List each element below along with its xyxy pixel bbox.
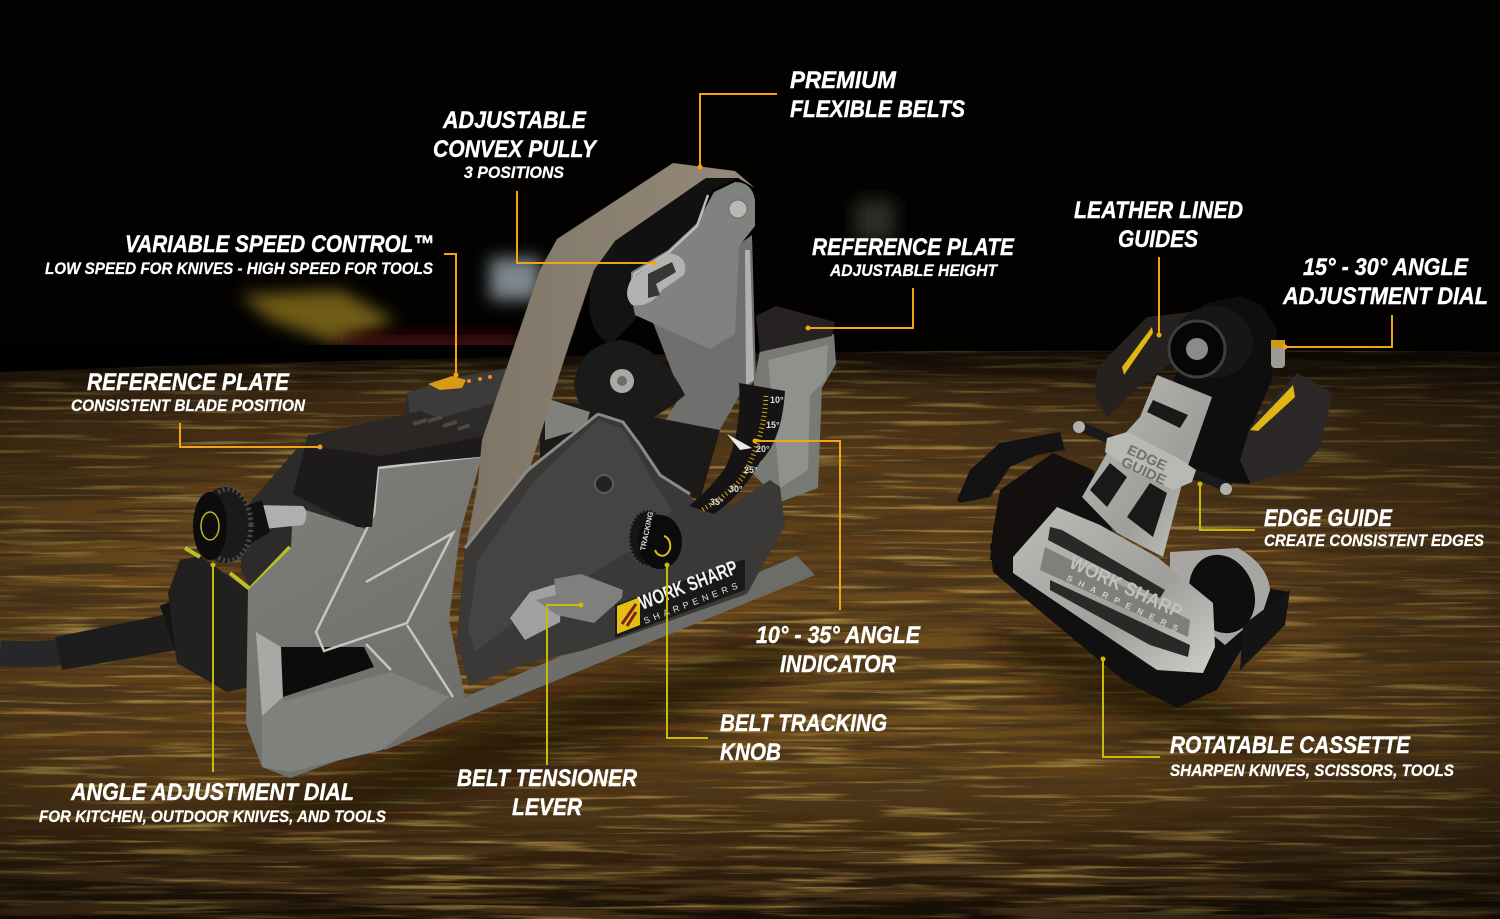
- callout: 10-35 angle indicator: 10° - 35° ANGLE: [756, 622, 921, 649]
- left reference plate: [293, 411, 490, 527]
- angle indicator scale: 15°: [766, 420, 780, 430]
- work sharp nameplate: WORK SHARP: [636, 557, 741, 615]
- top aluminium pulley plate: [631, 182, 755, 349]
- tower windows: [1090, 400, 1188, 537]
- callout: leather lined guides: GUIDES: [1118, 226, 1198, 253]
- right frame end: [1240, 590, 1290, 670]
- dark rotor behind wing: [990, 453, 1090, 560]
- back roller wheel: [589, 235, 668, 345]
- silver cassette body: WORK SHARP: [1066, 552, 1186, 623]
- tensioner slot: [510, 582, 562, 640]
- left guide pod: [1095, 312, 1190, 418]
- plate screw: [729, 200, 747, 218]
- angle indicator scale: 20°: [756, 444, 770, 454]
- callout: rotatable cassette: [1100, 656, 1455, 780]
- lower idler wheel: [574, 340, 685, 428]
- callout: reference plate right: [806, 234, 1015, 330]
- yellow green trim: [185, 547, 290, 589]
- callout: 10-35 angle indicator: INDICATOR: [780, 651, 897, 678]
- power cord: [0, 601, 203, 670]
- edge guide block: GUIDE: [1119, 453, 1169, 488]
- callout: 10-35 angle indicator: [752, 438, 921, 678]
- angle indicator scale: 10°: [770, 395, 784, 405]
- rear motor housing: [241, 366, 522, 588]
- cassette frame: [990, 453, 1290, 708]
- callout: belt tensioner lever: [457, 602, 638, 821]
- callout: variable speed control: LOW SPEED FOR KNIVES - HIGH SPEED FOR TOOLS: [45, 259, 434, 278]
- callout: edge guide: [1198, 482, 1485, 550]
- rear end cap: [168, 556, 250, 692]
- callout: reference plate left: CONSISTENT BLADE POSITION: [71, 396, 306, 415]
- tracking knob: [629, 510, 682, 569]
- dark cast housing: [457, 414, 785, 686]
- callout: angle adjustment dial: [39, 562, 387, 826]
- callout: variable speed control: [45, 231, 458, 378]
- right reference plate: [740, 306, 836, 502]
- callout: edge guide: EDGE GUIDE: [1264, 505, 1393, 532]
- callout: belt tracking knob: KNOB: [720, 739, 781, 766]
- angle adjustment dial: [193, 487, 306, 563]
- aluminium belt body: [246, 456, 815, 778]
- angle indicator scale: 30°: [729, 484, 743, 494]
- housing boss hole: [595, 475, 613, 493]
- aluminium rib highlights: [316, 456, 482, 697]
- callout: reference plate right: ADJUSTABLE HEIGHT: [829, 261, 998, 280]
- edge guide bar: [1073, 421, 1232, 495]
- angle indicator scale: 25°: [744, 465, 758, 475]
- belt sharpener machine: [0, 163, 836, 778]
- callout: adjustable convex pully: 3 POSITIONS: [464, 163, 565, 182]
- callout: 15-30 angle adjustment dial: [1282, 254, 1488, 350]
- callout: belt tensioner lever: LEVER: [512, 794, 583, 821]
- left wing: [957, 432, 1065, 503]
- callout: belt tracking knob: [664, 562, 887, 766]
- callout: premium flexible belts: FLEXIBLE BELTS: [790, 96, 965, 123]
- angle indicator scale: [689, 383, 785, 514]
- callout: variable speed control: VARIABLE SPEED CONTROL™: [125, 231, 434, 258]
- right guide pod: [1240, 373, 1333, 483]
- callout: belt tensioner lever: BELT TENSIONER: [457, 765, 638, 792]
- callout: rotatable cassette: SHARPEN KNIVES, SCISSORS, TOOLS: [1170, 761, 1455, 780]
- upright mast: [652, 235, 756, 433]
- tensioner lever: [536, 574, 623, 623]
- shadows beneath the tools: [245, 606, 1280, 856]
- tracking knob: TRACKING: [638, 511, 655, 551]
- silver tower: [1082, 375, 1212, 557]
- left end opening: [256, 632, 449, 772]
- rear black column: [1170, 296, 1277, 484]
- angle indicator scale: 35°: [710, 497, 724, 507]
- edge guide block: [1105, 432, 1196, 490]
- callout: reference plate left: REFERENCE PLATE: [87, 369, 290, 396]
- edge guide block: EDGE: [1125, 441, 1170, 473]
- callout: premium flexible belts: PREMIUM: [790, 67, 897, 94]
- callout: adjustable convex pully: ADJUSTABLE: [442, 107, 587, 134]
- convex pulley position slot: [627, 253, 685, 305]
- roller drum: [1170, 545, 1270, 645]
- callout: reference plate left: [71, 369, 322, 450]
- callout: leather lined guides: [1074, 197, 1243, 338]
- callout: 15-30 angle adjustment dial: 15° - 30° ANGLE: [1303, 254, 1469, 281]
- callout: adjustable convex pully: [433, 107, 656, 266]
- callout: rotatable cassette: ROTATABLE CASSETTE: [1170, 732, 1411, 759]
- callout: reference plate right: REFERENCE PLATE: [812, 234, 1015, 261]
- callout: angle adjustment dial: FOR KITCHEN, OUTDOOR KNIVES, AND TOOLS: [39, 807, 387, 826]
- abrasive belt: [466, 163, 755, 570]
- silver cassette body: [1013, 507, 1215, 673]
- speed control buttons: [428, 375, 492, 390]
- callout: leather lined guides: LEATHER LINED: [1074, 197, 1243, 224]
- edge guide sharpening attachment: [957, 296, 1333, 708]
- work sharp nameplate: [615, 557, 745, 638]
- side angle dial: [1271, 340, 1285, 368]
- dark gap behind housing: [540, 400, 720, 500]
- callout: adjustable convex pully: CONVEX PULLY: [433, 136, 598, 163]
- work sharp nameplate: SHARPENERS: [642, 581, 739, 626]
- callout: belt tracking knob: BELT TRACKING: [720, 710, 887, 737]
- callout: premium flexible belts: [698, 67, 965, 170]
- left yellow stripe: [1122, 327, 1153, 375]
- background: wooden table: [0, 345, 1500, 919]
- callout: angle adjustment dial: ANGLE ADJUSTMENT DIAL: [70, 779, 354, 806]
- front roller: [1169, 306, 1253, 378]
- silver cassette body: SHARPENERS: [1065, 573, 1180, 634]
- right yellow stripe: [1250, 385, 1295, 431]
